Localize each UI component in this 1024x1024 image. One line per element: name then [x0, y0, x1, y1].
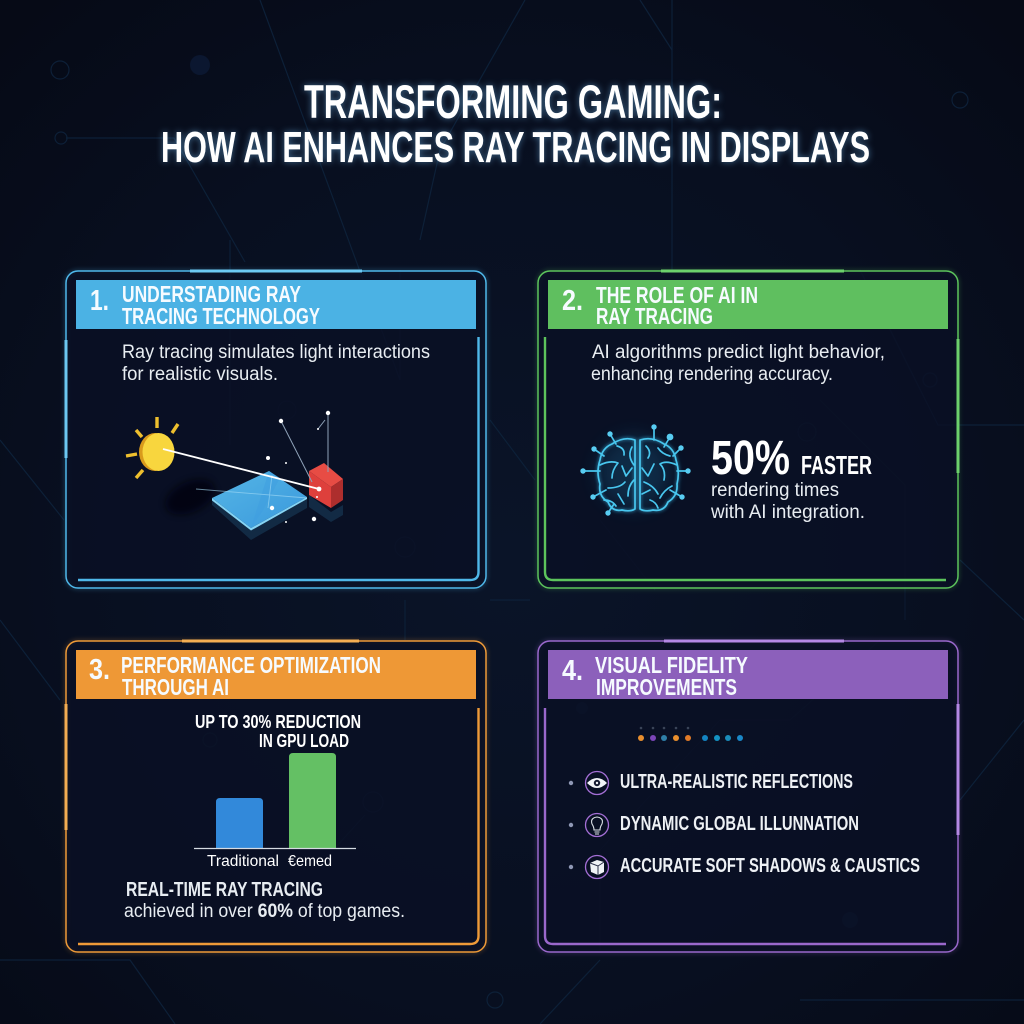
panel 1 frame: [66, 271, 486, 588]
panel 3: performance optimization: [66, 641, 486, 952]
icon: sun: [126, 417, 178, 478]
list item: reflections: ULTRA-REALISTIC REFLECTIONS: [620, 771, 853, 793]
panel 4: visual fidelity: [538, 641, 958, 952]
brain nodes: [580, 424, 691, 516]
panel 1 glow frame: [66, 271, 486, 588]
light ray: [163, 449, 319, 489]
stat caption: rendering times: [711, 480, 839, 501]
panel 1 number: 1.: [90, 285, 109, 317]
panel 3 glow frame: [66, 641, 486, 952]
bar: traditional: [216, 798, 263, 848]
panel 4 number: 4.: [562, 655, 583, 687]
brain lines glow: [598, 439, 678, 511]
panel 1 inner rails: [78, 337, 478, 580]
panel 2: the role of AI: [538, 271, 958, 588]
panel 2 heading: RAY TRACING: [596, 303, 713, 329]
panel 4 glow frame: [538, 641, 958, 952]
panel 1 header bar: [76, 280, 476, 329]
panel 2 description: AI algorithms predict light behavior,: [592, 342, 885, 363]
panel 3 frame: [66, 641, 486, 952]
panel 3 header bar: [76, 650, 476, 699]
list item: soft shadows: ACCURATE SOFT SHADOWS & CAUSTICS: [620, 855, 920, 877]
panel 4 frame: [538, 641, 958, 952]
stat: 50% faster: [710, 432, 872, 523]
stat number: 50%: [711, 432, 790, 485]
panel 3 accent bars: [66, 641, 359, 830]
panel 4 heading: VISUAL FIDELITY: [595, 652, 748, 678]
panel 2 frame: [538, 271, 958, 588]
icon: red cube: [309, 463, 343, 522]
real-time statistic: REAL-TIME RAY TRACING: [126, 879, 323, 901]
chart title: UP TO 30% REDUCTION: [195, 711, 361, 732]
panel 2 description: enhancing rendering accuracy.: [591, 364, 833, 385]
panel 2 heading: THE ROLE OF AI IN: [596, 282, 758, 308]
stat caption: with AI integration.: [710, 502, 865, 523]
panel 4 heading: IMPROVEMENTS: [596, 674, 737, 700]
panel 1 accent bars: [66, 271, 362, 458]
panel 1 heading: UNDERSTADING RAY: [122, 281, 301, 307]
panel 3 heading: THROUGH AI: [122, 674, 229, 700]
brain glow: [598, 436, 670, 508]
panel 2 number: 2.: [562, 285, 583, 317]
panel 4 inner rails: [545, 708, 946, 944]
decorative colour dots: [638, 727, 743, 741]
panel 1 heading: TRACING TECHNOLOGY: [122, 303, 320, 329]
title text: TRANSFORMING GAMING:: [304, 75, 722, 128]
ray tracing scene illustration: [126, 411, 343, 540]
panel 2 header bar: [548, 280, 948, 329]
icon: reflective plate: [196, 471, 307, 530]
title glow: TRANSFORMING GAMING:: [304, 75, 722, 128]
axis labels: Traditional: [207, 853, 279, 870]
real-time statistic: achieved in over 60% of top games.: [124, 901, 413, 922]
list item: soft shadows: [569, 855, 920, 878]
panel 4 accent bars: [664, 641, 958, 835]
axis labels: €emed: [288, 853, 332, 870]
panel 1 description: Ray tracing simulates light interactions: [122, 342, 430, 363]
chart axis: [194, 848, 356, 850]
panel 1: understanding ray tracing: [66, 271, 486, 588]
brain outline and connectors: [583, 427, 688, 513]
panel 2 accent bars: [661, 271, 958, 473]
list item: illumination: DYNAMIC GLOBAL ILLUNNATION: [620, 813, 859, 835]
panel 1 description: for realistic visuals.: [122, 364, 278, 385]
bar: AI: [289, 753, 336, 848]
bar chart: [194, 753, 356, 870]
list item: illumination: [569, 813, 859, 836]
chart title: IN GPU LOAD: [259, 730, 349, 751]
panel 2 glow frame: [538, 271, 958, 588]
mirror plate shadow: [212, 497, 307, 540]
panel 3 number: 3.: [89, 654, 110, 686]
panel 3 inner rails: [78, 708, 478, 944]
panel 4 header bar: [548, 650, 948, 699]
icon: neural brain: [580, 424, 691, 516]
reflection rays: [281, 413, 328, 482]
shadow blob: [160, 472, 220, 522]
light particles: [266, 411, 330, 523]
title: [161, 75, 870, 172]
panel 2 inner rails: [545, 337, 946, 580]
panel 3 heading: PERFORMANCE OPTIMIZATION: [121, 652, 381, 678]
list item: reflections: [569, 771, 853, 794]
stat word: FASTER: [801, 450, 872, 480]
